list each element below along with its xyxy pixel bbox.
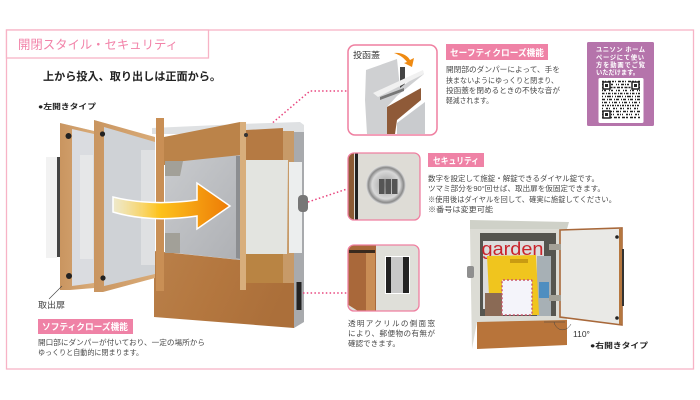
soft close heading: ソフティクローズ機能 (42, 321, 128, 332)
dotted connector: side window (303, 292, 347, 294)
right-opening type label: ●右開きタイプ (590, 340, 648, 350)
left-opening type label: ●左開きタイプ (38, 101, 96, 111)
QR panel: ユニソン ホーム (596, 46, 645, 54)
airmail envelope (502, 280, 532, 315)
security text: ※使用後はダイヤルを回して、確実に施錠してください。 (428, 194, 616, 204)
soft close text: 開口部にダンパーが付いており、一定の場所から (38, 337, 205, 347)
title tab: 開閉スタイル・セキュリティ (18, 38, 178, 52)
open door rear (60, 123, 94, 290)
large mailbox, left-opening (46, 118, 308, 328)
mailbox top cap (152, 122, 304, 134)
security text: 数字を設定して施錠・解錠できるダイヤル錠です。 (428, 173, 599, 183)
combination dial (298, 195, 308, 212)
safety close text: 挟まないようにゆっくりと閉まり、 (446, 75, 558, 85)
safety close text: 開閉部のダンパーによって、手を (446, 64, 560, 74)
lower wood front (477, 320, 567, 349)
angle marker (544, 322, 571, 330)
grey inner panel (165, 155, 241, 260)
inner wood back (164, 122, 240, 165)
soft close text (38, 337, 205, 357)
QR panel (587, 42, 654, 126)
open door front (94, 120, 155, 292)
yellow mail behind panel (246, 253, 283, 284)
small mailbox, right-opening with mail (467, 220, 624, 349)
side window text: 透明アクリルの側面窓 (348, 318, 435, 328)
soft close heading (38, 319, 133, 334)
security text (428, 173, 616, 214)
small booklet (485, 293, 503, 316)
lid label: 投函蓋 (353, 49, 380, 60)
white side panel (245, 160, 288, 254)
soft close text: ゆっくりと自動的に閉まります。 (38, 347, 143, 357)
dotted connector: dial (308, 189, 347, 202)
security text: ツマミ部分を90°回せば、取出扉を仮固定できます。 (428, 183, 605, 193)
title tab (6, 30, 208, 58)
lower wood body (154, 251, 294, 328)
hinges (549, 244, 561, 250)
small mailbox, right-opening with mail: garden (482, 239, 544, 259)
safety close text: 投函蓋を閉めるときの不快な音が (446, 85, 560, 95)
side window text: により、郵便物の有無が (348, 328, 435, 338)
headline: 上から投入、取り出しは正面から。 (43, 69, 221, 83)
centre post (156, 118, 164, 291)
side window text (348, 318, 435, 348)
callout line: door (49, 286, 62, 299)
safety close text (446, 64, 560, 105)
security text: ※番号は変更可能 (428, 204, 493, 214)
security heading (428, 153, 484, 167)
photo panel: side window (348, 245, 419, 311)
QR panel: 方を動画でご覧 (596, 60, 646, 69)
magazine (483, 241, 544, 309)
safety close text: 軽減されます。 (446, 95, 493, 105)
QR panel: いただけます。 (596, 68, 639, 76)
dotted connector: damper (270, 91, 347, 125)
QR panel: ページにて使い (596, 52, 644, 62)
opening door right (240, 122, 246, 290)
side window text: 確認できます。 (348, 338, 400, 348)
open door (560, 228, 622, 325)
acrylic window (385, 256, 410, 294)
door label: 取出扉 (38, 299, 65, 310)
angle label: 110° (573, 329, 590, 339)
lock dial (366, 165, 406, 205)
safety close heading: セーフティクローズ機能 (450, 47, 544, 58)
hinges (165, 161, 183, 176)
yellow envelope (487, 255, 539, 315)
photo panel: combination lock (348, 153, 420, 220)
key dial (467, 266, 474, 278)
yellow-orange arrow (113, 183, 230, 229)
security heading: セキュリティ (433, 156, 479, 166)
QR code (598, 78, 644, 123)
safety close heading (446, 44, 548, 60)
photo panel: mail slot lid (348, 45, 437, 135)
icon: lid arrow (394, 53, 414, 67)
side window (296, 282, 302, 310)
